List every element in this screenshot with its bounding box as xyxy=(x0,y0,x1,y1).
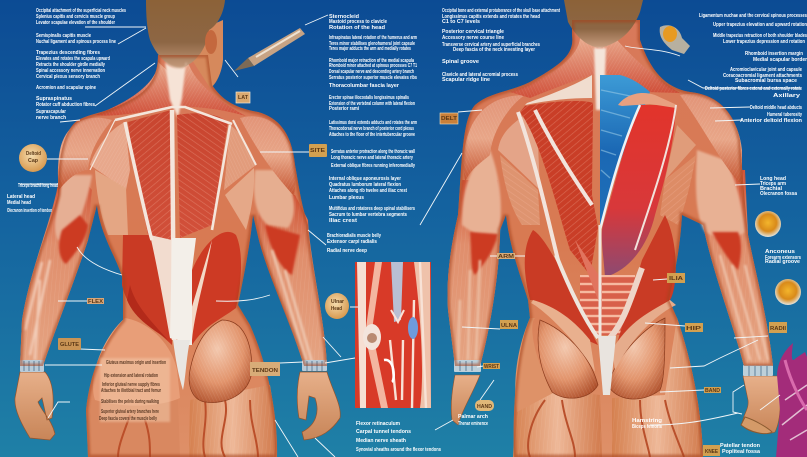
label tag 11: ILIA xyxy=(669,276,684,282)
text block: upper right notes: Brachial xyxy=(760,186,783,192)
text block: centre column notes: Sternocleid xyxy=(329,14,359,20)
text block: centre column notes: Multifidus and rotatores deep spinal stabilisers xyxy=(329,206,415,212)
left figure hair xyxy=(146,0,225,70)
text block: upper middle notes: Spinal groove xyxy=(442,59,479,65)
text block: upper left notes: Levator scapulae elevation of the shoulder xyxy=(36,20,115,26)
left figure deltoids xyxy=(58,116,295,196)
label tag 12 xyxy=(685,323,703,332)
right figure hands xyxy=(451,375,780,434)
text block: upper right notes: Triceps arm xyxy=(760,181,787,187)
text block: centre column notes: Teres minor stabilises glenohumeral joint capsule xyxy=(329,41,415,47)
text block: centre column notes: Quadratus lumborum lateral flexion xyxy=(329,182,401,188)
left figure gluteals xyxy=(93,318,252,406)
organ: purple tissue xyxy=(776,343,807,457)
text block: centre column notes: Attaches along rib twelve and iliac crest xyxy=(329,188,407,194)
left figure ear xyxy=(205,30,217,54)
label tag 5 xyxy=(250,362,280,376)
icon: gold capsule top right xyxy=(660,25,690,54)
text block: left small notes: Triceps brachii long head xyxy=(18,183,58,189)
text block: upper middle notes: Scapular ridge line xyxy=(442,77,490,83)
coin badge centre xyxy=(325,293,349,319)
label tag 3: FLEX xyxy=(88,299,104,305)
text block: upper left notes: Spinal accessory nerve innervation xyxy=(36,68,105,74)
text block: centre column notes: Latissimus dorsi extends adducts and rotates the arm xyxy=(329,120,417,126)
label tag 1 xyxy=(236,92,250,103)
coin text centre: Ulnar xyxy=(331,299,344,305)
text block: centre column notes: Iliac crest xyxy=(329,218,357,224)
text block: upper left notes: Suprascapular xyxy=(36,109,66,115)
label tag 7: ARM xyxy=(498,254,514,260)
glute text block: Inferior gluteal nerve supply fibres xyxy=(102,382,160,388)
label tag 15 xyxy=(703,445,720,456)
right figure trapezius xyxy=(510,34,680,98)
coin text centre: Head xyxy=(331,306,342,312)
label tag 5: TENDON xyxy=(252,368,278,374)
right figure lower lats xyxy=(525,215,676,350)
text block: centre column notes: External oblique fibres running inferomedially xyxy=(331,163,415,169)
text block: left small notes: Medial head xyxy=(7,200,31,206)
text block: upper right notes: Anconeus xyxy=(765,249,795,255)
label tag 8 xyxy=(500,320,518,329)
text block: centre column notes: Brachioradialis muscle belly xyxy=(327,233,381,239)
text block: upper right notes: Subacromial bursa space xyxy=(735,78,797,84)
label tag 2 xyxy=(309,144,327,157)
text block: left small notes: Lateral head xyxy=(7,194,35,200)
label tag 4 xyxy=(58,338,81,350)
text block: centre column notes: Radial nerve deep xyxy=(327,248,367,254)
text block: upper left notes: Retracts the shoulder girdle medially xyxy=(36,62,105,68)
label tag 15: KNEE xyxy=(705,449,719,455)
coin badge left xyxy=(19,144,47,172)
text block: lower centre notes: Palmar arch xyxy=(458,414,488,420)
text block: centre column notes: Infraspinatus lateral rotation of the humerus and arm xyxy=(329,35,417,41)
text block: centre column notes: Extensor carpi radialis xyxy=(327,239,377,245)
label tag 7 xyxy=(497,253,515,260)
pen-shaped structure icon xyxy=(234,28,305,71)
coin text left xyxy=(26,151,41,164)
text block: upper middle notes: Clavicle and lateral acromial process xyxy=(442,72,518,78)
icon: gold capsule lower right xyxy=(775,279,801,305)
glute text block: Hip extension and lateral rotation xyxy=(104,373,158,379)
right figure deltoids xyxy=(463,94,742,185)
text block: centre column notes: Dorsal scapular nerve and descending artery branch xyxy=(329,69,414,75)
text block: upper left notes: Trapezius descending fibres xyxy=(36,50,100,56)
label tag 11 xyxy=(667,273,685,283)
text block: centre column notes: Serratus posterior superior muscle elevates ribs xyxy=(329,75,417,81)
label tag 9: WRIST xyxy=(484,364,499,370)
text block: upper left notes: Cervical plexus sensory branch xyxy=(36,74,100,80)
text block: upper left notes: Splenius capitis and cervicis muscle group xyxy=(36,14,115,20)
left figure thighs xyxy=(88,385,276,457)
text block: upper right notes: Long head xyxy=(760,176,786,182)
right figure wrist bands xyxy=(454,360,773,376)
right figure red band xyxy=(600,93,677,277)
label tag 6 xyxy=(440,113,458,124)
text block: upper right notes: Olecranon fossa xyxy=(760,191,797,197)
text block: centre column notes: Sacrum to lumbar vertebra segments xyxy=(329,212,407,218)
text block: centre column notes: Attaches to the floor of the intertubercular groove xyxy=(329,132,415,138)
label tag 13: BAND xyxy=(705,388,720,394)
text block: lower centre notes xyxy=(356,414,760,455)
glute text block: Gluteus maximus origin and insertion xyxy=(106,360,166,366)
text block: centre column notes: Rhomboid major retraction of the medial scapula xyxy=(329,58,414,64)
text block: upper middle notes: Posterior cervical triangle xyxy=(442,29,504,35)
text block: upper left notes: Semispinalis capitis muscle xyxy=(36,33,91,39)
left figure trapezius xyxy=(95,62,246,116)
text block: centre column notes: Thoracolumbar fascia layer xyxy=(329,83,399,89)
text block: upper right notes: Radial groove xyxy=(765,259,800,265)
left figure wrist bands xyxy=(20,360,327,372)
text block: lower centre notes: Carpal tunnel tendons xyxy=(356,429,411,435)
text block: left small notes: Olecranon insertion of tendon xyxy=(7,208,52,214)
text block: upper right notes xyxy=(699,13,807,265)
text block: lower centre notes: Flexor retinaculum xyxy=(356,421,401,427)
right figure blue fibres xyxy=(601,90,635,178)
left figure central aponeurosis xyxy=(170,238,196,345)
right figure gluteals xyxy=(515,300,676,412)
icon: gold capsule right middle xyxy=(755,211,781,237)
text block: centre column notes: Rhomboid minor attached at spinous processes C7 T1 xyxy=(329,63,417,69)
left figure latissimus xyxy=(122,110,241,345)
callout labels xyxy=(26,92,787,456)
text block: upper left notes: Elevates and rotates the scapula upward xyxy=(36,56,110,62)
left figure side of face xyxy=(192,20,223,88)
left figure neck tendon xyxy=(165,62,187,118)
right figure silhouette xyxy=(447,20,773,457)
text block: centre column notes xyxy=(327,14,417,254)
left figure arms xyxy=(20,170,327,366)
coin text left: Cap xyxy=(28,158,38,164)
text block: upper right notes: Medial scapular border xyxy=(753,57,807,63)
right figure blue muscle xyxy=(600,75,650,228)
glute text block: Stabilises the pelvis during walking xyxy=(101,399,159,405)
text block: centre column notes: Serratus anterior protraction along the thoracic wall xyxy=(331,149,415,155)
text block: upper right notes: Anterior deltoid flexion xyxy=(740,118,802,124)
text block: upper middle notes: Occipital bone and external protuberance of the skull base attachment xyxy=(442,8,560,14)
label tag 10 xyxy=(475,400,494,411)
text block: upper left notes: Acromion and scapular spine xyxy=(36,85,96,91)
right figure scapular muscles xyxy=(498,115,696,225)
left figure hands xyxy=(15,372,340,440)
text block: upper middle notes: Accessory nerve course line xyxy=(442,35,504,41)
text block: upper left notes: Nuchal ligament and spinous process line xyxy=(36,39,116,45)
text block: upper middle notes: C1 to C7 levels xyxy=(442,19,480,25)
text block: lower centre notes: Median nerve sheath xyxy=(356,438,406,444)
coin text centre xyxy=(331,299,344,312)
label tag 1: LAT xyxy=(238,95,248,101)
text block: centre column notes: Lumbar plexus xyxy=(329,195,364,201)
right figure rhomboids and latissimus left xyxy=(518,101,598,275)
label tag 3 xyxy=(87,298,104,305)
glute text block: Attaches to iliotibial tract and femur xyxy=(101,388,161,394)
left figure edge shading xyxy=(20,55,327,457)
right figure upper left aponeurosis xyxy=(525,75,592,105)
text block: centre column notes: Posterior rami xyxy=(329,106,360,112)
figure: right back view xyxy=(447,0,780,457)
right figure lower back ribs xyxy=(575,240,635,335)
right figure edge shading xyxy=(447,20,773,457)
label tag 14 xyxy=(769,322,787,333)
right figure arms xyxy=(447,150,773,366)
text block: upper left notes: Rotator cuff abduction fibres xyxy=(36,102,95,108)
label tag 12: HIP xyxy=(686,326,702,332)
text block: upper middle notes: Longissimus capitis extends and rotates the head xyxy=(442,14,540,20)
label tag 4: GLUTE xyxy=(60,342,80,348)
text block: upper right notes: Axillary xyxy=(773,93,800,99)
coin text left: Deltoid xyxy=(26,151,41,157)
label tag 8: ULNA xyxy=(501,323,517,329)
text block: centre column notes: Thoracodorsal nerve branch of posterior cord plexus xyxy=(329,126,414,132)
text block: upper left notes xyxy=(36,8,126,121)
text block: lower centre notes: Hamstring xyxy=(632,418,662,424)
right figure neck and hair xyxy=(564,0,643,110)
text block: upper middle notes: Transverse cervical artery and superficial branches xyxy=(442,42,540,48)
text block: lower centre notes: Biceps femoris xyxy=(632,424,662,430)
text block: centre column notes: Teres major adducts the arm and medially rotates xyxy=(329,46,411,52)
glute text block: Superior gluteal artery branches here xyxy=(101,409,159,415)
text block: upper middle notes: Deep fascia of the neck investing layer xyxy=(453,47,535,53)
text block: centre column notes: Internal oblique aponeurosis layer xyxy=(329,176,401,182)
text block: upper left notes: Occipital attachment of the superficial neck muscles xyxy=(36,8,126,14)
glute text block: Deep fascia covers the muscle belly xyxy=(99,416,157,422)
text block: lower centre notes: Thenar eminence xyxy=(458,421,488,427)
text block: centre column notes: Rotation of the head xyxy=(329,25,385,31)
text block: centre column notes: Erector spinae iliocostalis longissimus spinalis xyxy=(329,95,409,101)
left figure silhouette xyxy=(20,55,327,457)
glute text block xyxy=(99,358,170,422)
text block: lower centre notes: Synovial sheaths around the flexor tendons xyxy=(356,447,441,453)
text block: left small notes xyxy=(7,183,58,214)
right figure thighs xyxy=(513,318,703,457)
inset: tendon close-up panel xyxy=(355,262,431,408)
text block: upper middle notes xyxy=(442,8,560,83)
text block: centre column notes: Mastoid process to clavicle xyxy=(329,19,387,25)
label tag 10: HAND xyxy=(477,404,492,410)
text block: centre column notes: Extension of the vertebral column with lateral flexion xyxy=(329,101,415,107)
left figure tendons xyxy=(90,107,256,340)
label tag 14: RADII xyxy=(770,326,787,332)
left figure scapular muscles xyxy=(90,122,256,235)
figure: left back view xyxy=(15,0,340,457)
text block: lower centre notes: Patellar tendon xyxy=(720,443,760,449)
label tag 6: DELT xyxy=(441,116,457,122)
text block: upper left notes: Supraspinatus xyxy=(36,96,72,102)
text block: centre column notes: Long thoracic nerve and lateral thoracic artery xyxy=(331,155,413,161)
text block: upper left notes: nerve branch xyxy=(36,115,66,121)
text block: lower centre notes: Popliteal fossa xyxy=(722,449,760,455)
label tag 2: SITE xyxy=(310,148,326,154)
